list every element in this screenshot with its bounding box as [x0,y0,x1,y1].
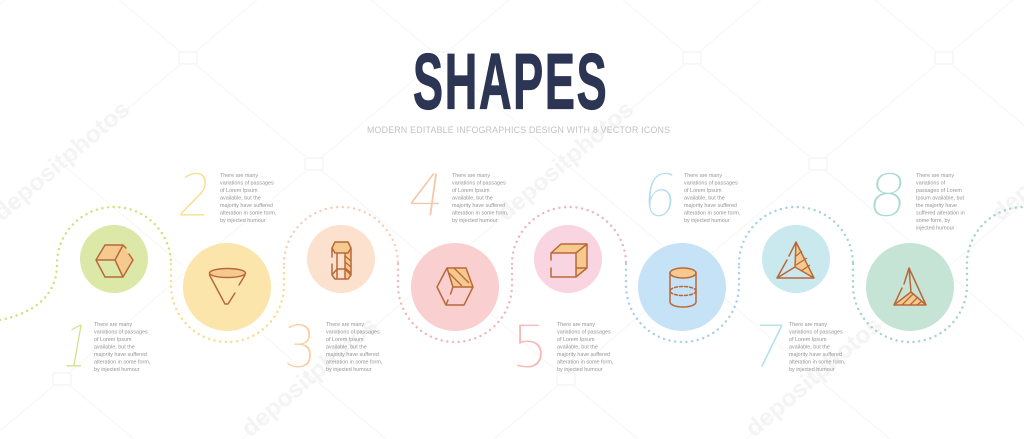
number 3: 3 [283,312,317,381]
text block 5: alteration in some form, [557,360,614,366]
text block 8: the majority have [916,203,957,209]
text block 6: by injected humour [684,218,730,224]
circle 2 [183,243,271,331]
circle 1 [80,225,148,293]
text block 7: variations of passages [789,330,843,336]
number 6: 6 [640,161,681,230]
icon: cube [96,245,133,277]
text block 8: suffered alteration in [916,210,965,216]
text block 5: There are many [557,322,595,328]
text block 1: of Lorem Ipsum [94,337,132,343]
text block 6: There are many [684,173,722,179]
number 1: 1 [57,313,95,382]
watermark text [0,96,1024,439]
subtitle: MODERN EDITABLE INFOGRAPHICS DESIGN WITH 8 VECTOR ICONS [367,125,670,135]
text block 2: variations of passages [220,180,274,186]
watermark text: depositphotos [236,312,383,439]
text block 1: alteration in some form, [94,360,151,366]
number 2: 2 [175,161,216,230]
text block 4: variations of passages [452,180,506,186]
text block 5: by injected humour [557,367,603,373]
text block 5 [557,322,614,373]
icon: triangle pyramid right face [777,242,814,278]
text block 3: of Lorem Ipsum [326,337,364,343]
text block 8: There are many [916,173,954,179]
text block 5: available, but the [557,344,598,350]
text block 7: by injected humour [789,367,835,373]
text block 3 [326,322,383,373]
circle 5 [534,225,602,293]
text block 1: by injected humour [94,367,140,373]
text block 6: variations of passages [684,180,738,186]
number 7: 7 [747,312,791,381]
text block 2 [220,173,277,224]
text block 1: available, but the [94,344,135,350]
watermark text: depositphotos [492,96,639,227]
text block 2: of Lorem Ipsum [220,188,258,194]
text block 4 [452,173,509,224]
text block 6 [684,173,741,224]
text block 7: of Lorem Ipsum [789,337,827,343]
text block 3: majority have suffered [326,352,379,358]
text block 6: available, but the [684,196,725,202]
icon: hexagon box [437,268,473,305]
watermark camera icons [53,52,953,385]
text block 7: alteration in some form, [789,360,846,366]
text block 2: alteration in some form, [220,210,277,216]
text block 8: passages of Lorem [916,188,962,194]
watermark text: depositphotos [740,312,887,439]
text block 2: majority have suffered [220,203,273,209]
circle 4 [411,243,499,331]
text block 6: majority have suffered [684,203,737,209]
text block 8: Ipsum available, but [916,196,964,202]
text block 5: majority have suffered [557,352,610,358]
circle 6 [638,243,726,331]
text block 2: There are many [220,173,258,179]
text block 7: available, but the [789,344,830,350]
text block 5: of Lorem Ipsum [557,337,595,343]
text block 3: alteration in some form, [326,360,383,366]
text block 3: variations of passages [326,330,380,336]
number 8: 8 [865,161,911,230]
text block 6: of Lorem Ipsum [684,188,722,194]
text block 8: some form, by [916,218,950,224]
text block 4: alteration in some form, [452,210,509,216]
text block 2: by injected humour [220,218,266,224]
text block 1: variations of passages [94,330,148,336]
text block 3: available, but the [326,344,367,350]
icon: hexagonal prism [332,242,351,279]
text block 4: by injected humour [452,218,498,224]
circle 7 [762,225,830,293]
text block 4: There are many [452,173,490,179]
icon: cube with back faces [551,244,587,277]
text block 5: variations of passages [557,330,611,336]
icon: cylinder [670,268,696,307]
number 4: 4 [404,161,450,230]
text block 4: majority have suffered [452,203,505,209]
text block 3: There are many [326,322,364,328]
text block 3: by injected humour [326,367,372,373]
text block 4: available, but the [452,196,493,202]
circle 8 [866,243,954,331]
text block 7: majority have suffered [789,352,842,358]
text block 8: variations of [916,180,946,186]
text block 4: of Lorem Ipsum [452,188,490,194]
text block 7 [789,322,846,373]
title: SHAPES [413,37,608,126]
circle 3 [307,225,375,293]
text block 6: alteration in some form, [684,210,741,216]
icon: cone [210,268,246,304]
dotted connector path [0,207,1024,342]
text block 8 [916,173,965,232]
number 5: 5 [511,312,549,381]
icon: triangle pyramid bottom face [894,268,926,305]
text block 2: available, but the [220,196,261,202]
text block 8: injected humour [916,226,955,232]
text block 1 [94,322,151,373]
text block 7: There are many [789,322,827,328]
text block 1: majority have suffered [94,352,147,358]
text block 1: There are many [94,322,132,328]
